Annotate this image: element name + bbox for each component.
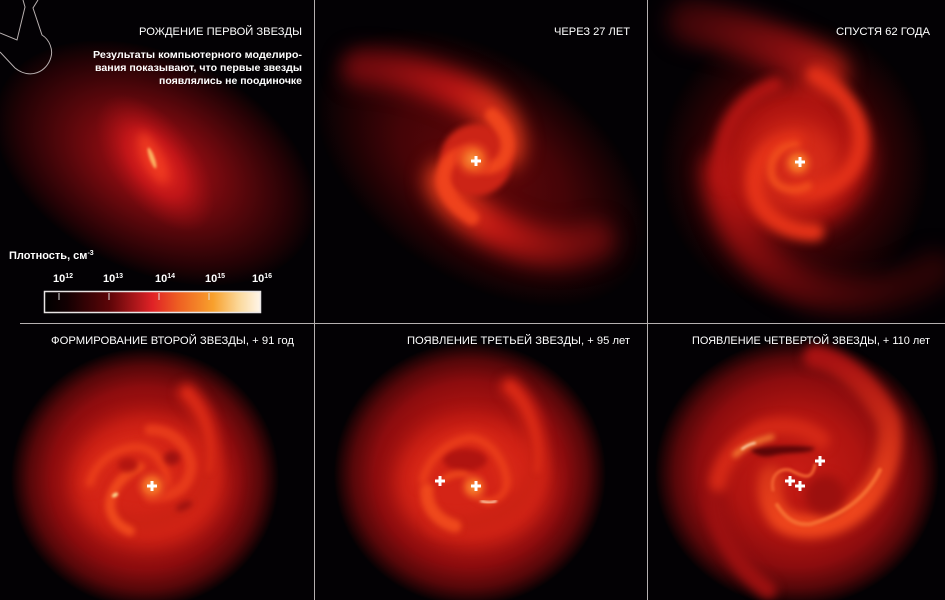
panel: after 62 years <box>660 20 935 310</box>
soft arms <box>132 377 224 523</box>
inner dark region <box>805 475 845 515</box>
star markers <box>435 476 481 491</box>
central glow <box>749 121 841 209</box>
cloud <box>326 38 638 298</box>
density legend <box>9 250 272 312</box>
legend title: Плотность, см <box>9 250 87 262</box>
legend scale labels: 16 <box>264 273 272 280</box>
panel: second star forming <box>11 348 279 600</box>
spiral arms <box>423 387 538 526</box>
bright streak <box>735 437 772 455</box>
heading: birth of first star: РОЖДЕНИЕ ПЕРВОЙ ЗВЕЗДЫ <box>139 25 302 38</box>
panel: after 27 years <box>326 35 638 298</box>
central disc <box>440 124 512 196</box>
legend scale labels: 13 <box>115 273 123 280</box>
bright knot <box>111 492 119 498</box>
bright core <box>102 100 208 226</box>
panel: third star appears <box>334 342 606 600</box>
legend scale labels: 10 <box>53 273 65 285</box>
legend scale labels: 12 <box>65 273 73 280</box>
disk <box>334 342 606 600</box>
spiral arms <box>722 75 860 232</box>
inner glow <box>458 142 490 176</box>
legend scale labels <box>53 273 272 285</box>
spiral arms <box>444 115 507 218</box>
wide arms <box>360 68 595 247</box>
legend scale labels: 14 <box>167 273 175 280</box>
wide glow <box>72 418 224 546</box>
color bar <box>44 292 260 312</box>
legend scale labels: 10 <box>103 273 115 285</box>
icon: flask outline <box>0 0 52 74</box>
star marker <box>147 481 157 491</box>
text block: intro: появлялись не поодиночке <box>159 75 302 87</box>
dark lane <box>750 446 815 456</box>
legend scale labels: 15 <box>217 273 225 280</box>
inner glow <box>137 471 166 499</box>
legend scale labels: 10 <box>205 273 217 285</box>
scale ticks <box>59 293 209 300</box>
star marker <box>795 157 805 167</box>
wide arms <box>690 22 935 295</box>
legend scale labels: 10 <box>252 273 264 285</box>
heading: third star: ПОЯВЛЕНИЕ ТРЕТЬЕЙ ЗВЕЗДЫ, + 95 лет <box>407 334 630 347</box>
ridges <box>772 465 880 524</box>
wide glow <box>397 421 549 545</box>
heading: after 27 years: ЧЕРЕЗ 27 ЛЕТ <box>554 26 630 38</box>
text block: intro: Результаты компьютерного моделиро- <box>93 49 303 61</box>
heading: after 62 years: СПУСТЯ 62 ГОДА <box>836 26 931 38</box>
panel: birth of first star <box>0 0 310 282</box>
heading: second star: ФОРМИРОВАНИЕ ВТОРОЙ ЗВЕЗДЫ, + 91 год <box>51 334 295 347</box>
disk <box>11 348 279 600</box>
heading: fourth star: ПОЯВЛЕНИЕ ЧЕТВЕРТОЙ ЗВЕЗДЫ, + 110 лет <box>692 334 930 347</box>
star markers <box>785 456 825 491</box>
star marker <box>471 156 481 166</box>
inner swirl <box>771 145 808 190</box>
dark gaps <box>118 451 194 513</box>
soft arms <box>472 371 552 522</box>
legend title: -3 <box>87 250 94 257</box>
spiral arms <box>90 393 210 531</box>
text block: intro: вания показывают, что первые звезды <box>95 62 302 74</box>
dark gap <box>443 449 487 471</box>
inner glow <box>784 150 812 178</box>
wide arm <box>715 357 890 590</box>
legend scale labels: 10 <box>155 273 167 285</box>
disk <box>655 339 939 600</box>
inner glow <box>460 474 488 502</box>
panel: fourth star appears <box>655 339 939 600</box>
text block: intro <box>93 49 303 87</box>
density cloud <box>0 44 310 282</box>
cloud <box>668 33 922 296</box>
bright streak <box>481 501 496 502</box>
